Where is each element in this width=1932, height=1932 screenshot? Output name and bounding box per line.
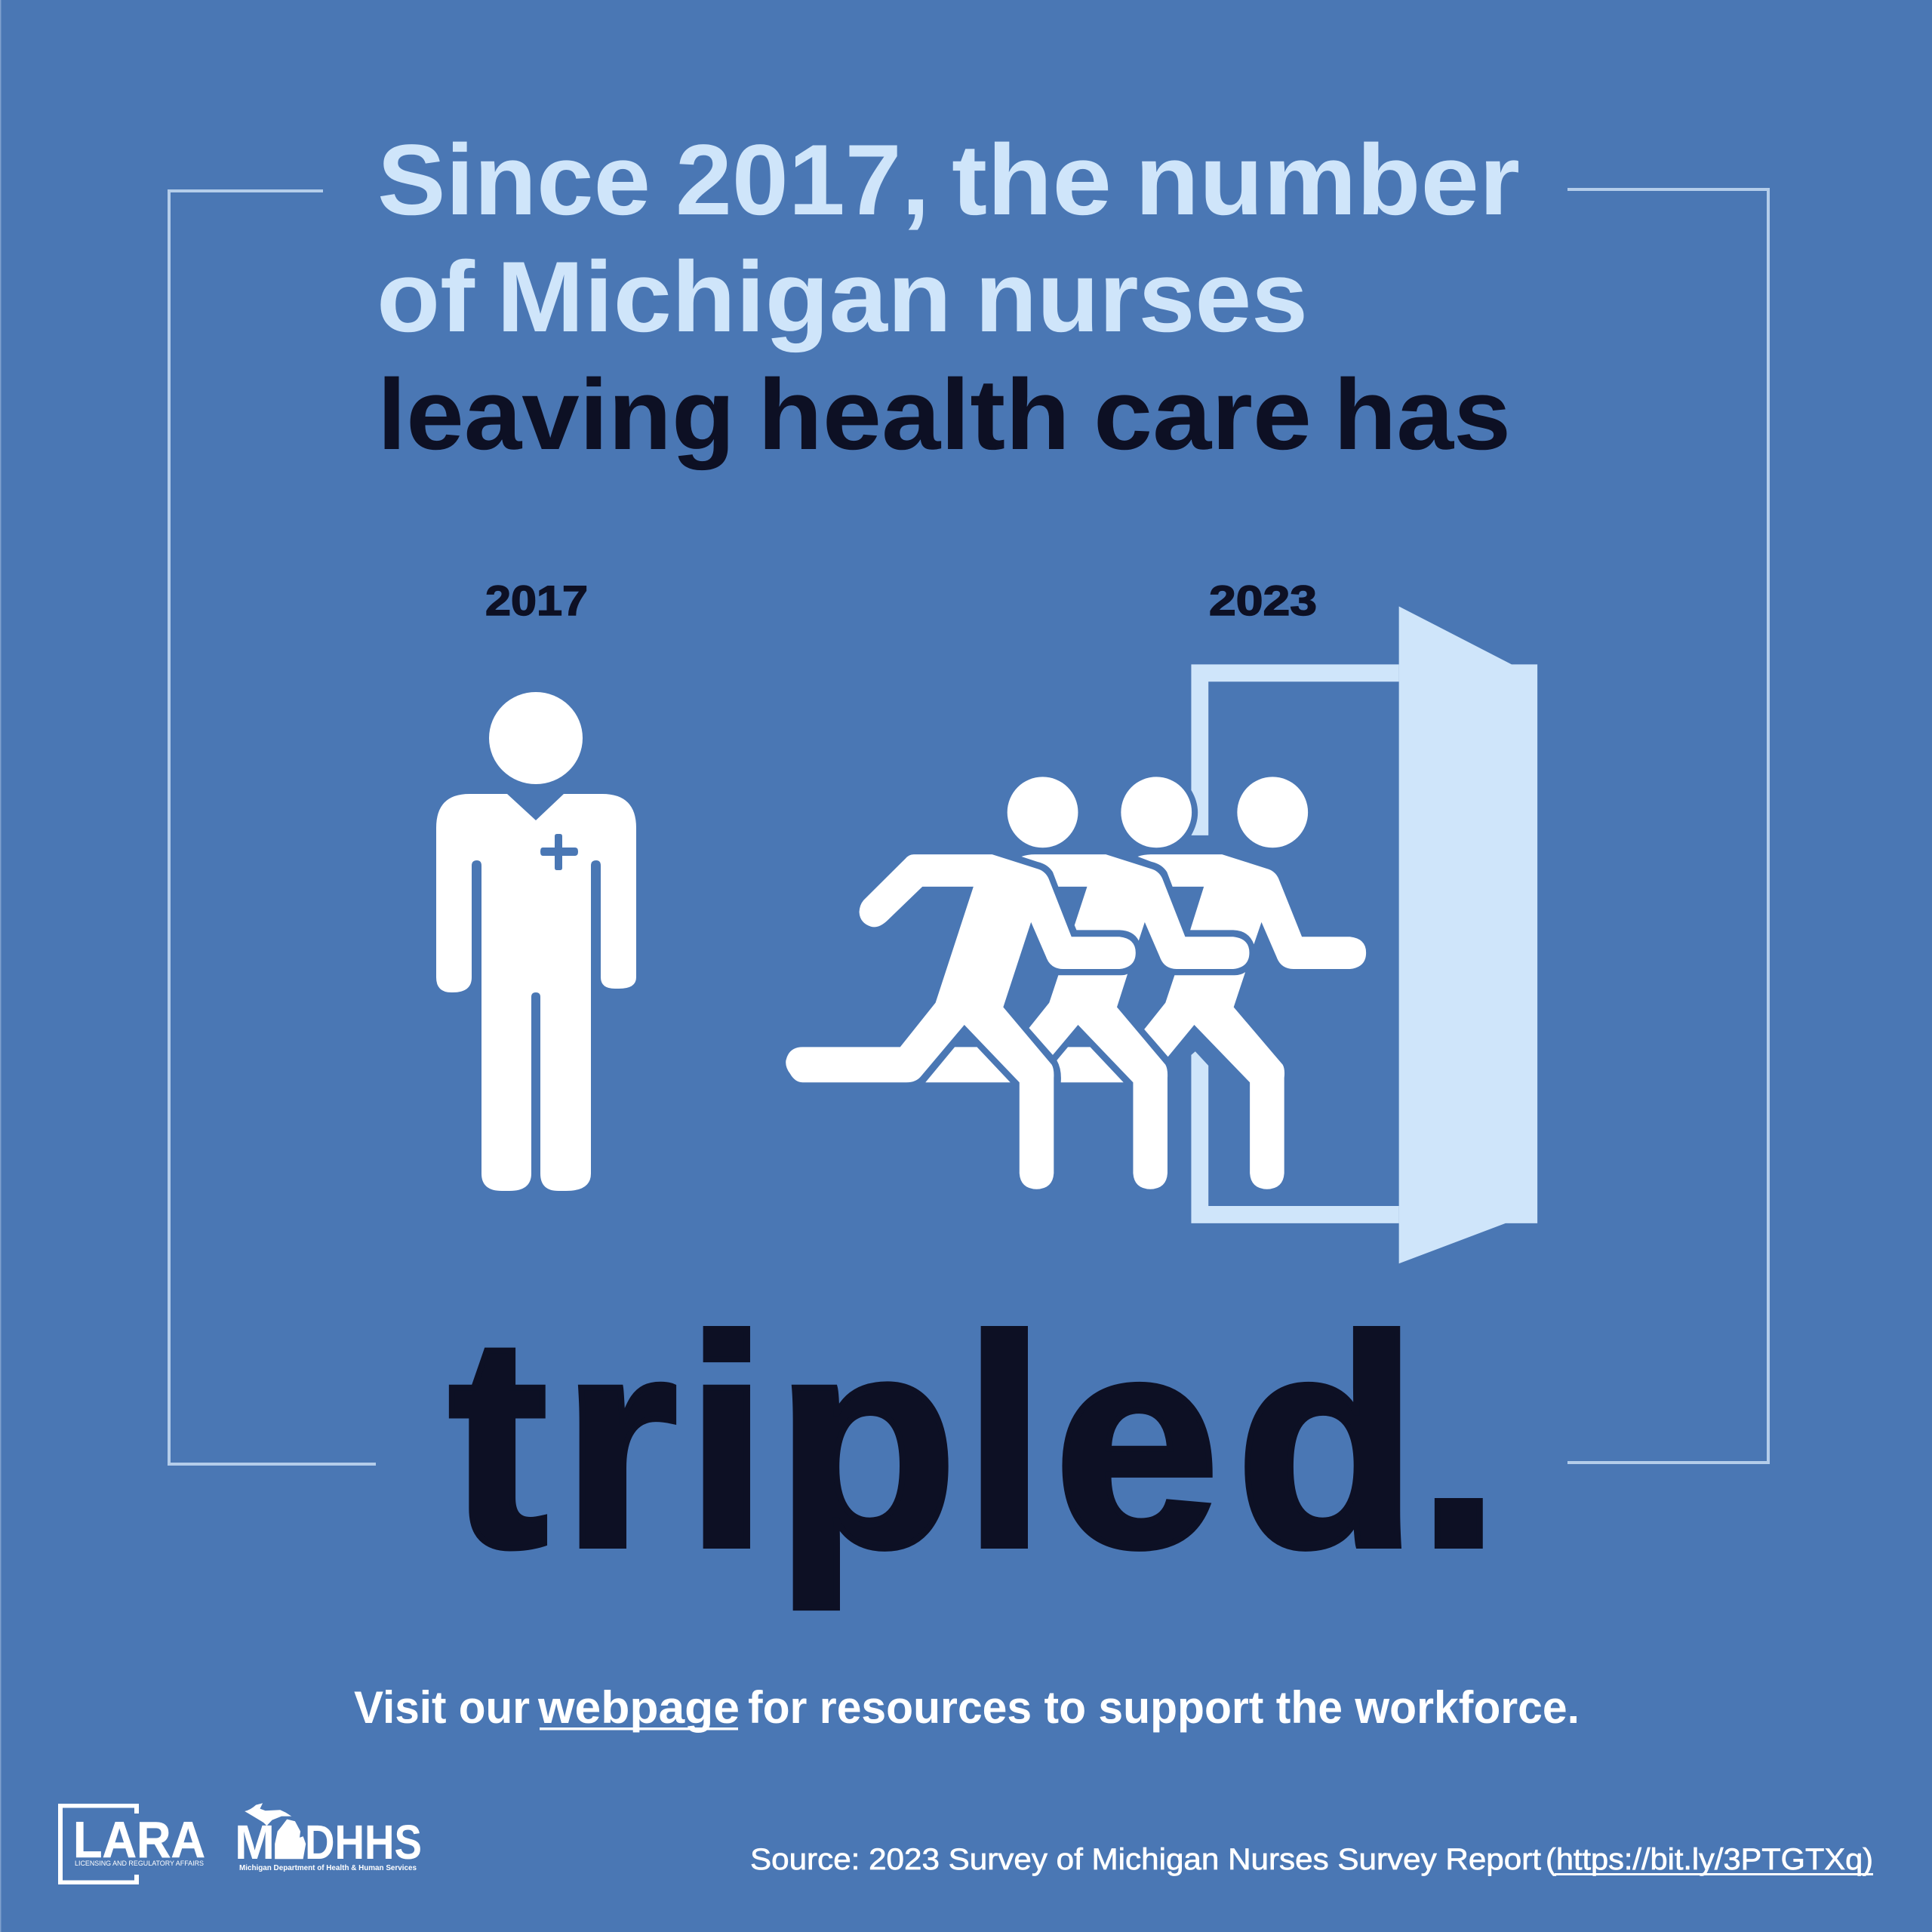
heading: the	[952, 125, 1112, 236]
logo: LARA: LICENSING AND REGULATORY AFFAIRS	[75, 1860, 204, 1868]
heading: nurses	[975, 242, 1308, 353]
frame: left bracket	[169, 191, 376, 1464]
heading: number	[1135, 125, 1520, 236]
label: 2023: 2023	[1209, 577, 1317, 624]
call to action	[354, 1682, 1580, 1733]
source note: Source: 2023 Survey of Michigan Nurses Survey Report	[750, 1843, 1541, 1876]
heading: leaving	[377, 359, 735, 471]
heading: health	[758, 359, 1070, 471]
source note: (https://bit.ly/3PTGTXq)	[1546, 1843, 1873, 1876]
source note	[750, 1843, 1873, 1876]
icon: nurse cross	[540, 834, 578, 870]
logo: MDHHS	[235, 1803, 422, 1872]
door frame	[1191, 664, 1399, 1223]
frame: right bracket	[1567, 189, 1768, 1463]
icon: nurse	[436, 692, 636, 1191]
heading: has	[1334, 359, 1511, 471]
logo: MDHHS: M	[235, 1815, 275, 1869]
call to action: webpage	[537, 1682, 740, 1733]
heading: of	[377, 242, 475, 353]
heading	[377, 125, 1520, 471]
icon: three running people	[786, 777, 1366, 1189]
logo: LARA	[58, 1804, 205, 1884]
heading: care	[1094, 359, 1312, 471]
call to action: for resources to support the workforce.	[748, 1682, 1580, 1733]
heading: Michigan	[497, 242, 952, 353]
heading: Since	[377, 125, 651, 236]
logo: LARA: LARA	[73, 1811, 205, 1869]
label: 2017: 2017	[485, 577, 588, 624]
logo: MDHHS: DHHS	[305, 1815, 422, 1869]
icon: exit door	[1191, 606, 1537, 1263]
heading: 2017,	[675, 125, 930, 236]
headline word: tripled: tripled.	[448, 1275, 1500, 1611]
call to action: Visit our	[354, 1682, 530, 1733]
door panel	[1399, 606, 1537, 1263]
logo: MDHHS: Michigan Department of Health & Human Services	[239, 1864, 417, 1872]
